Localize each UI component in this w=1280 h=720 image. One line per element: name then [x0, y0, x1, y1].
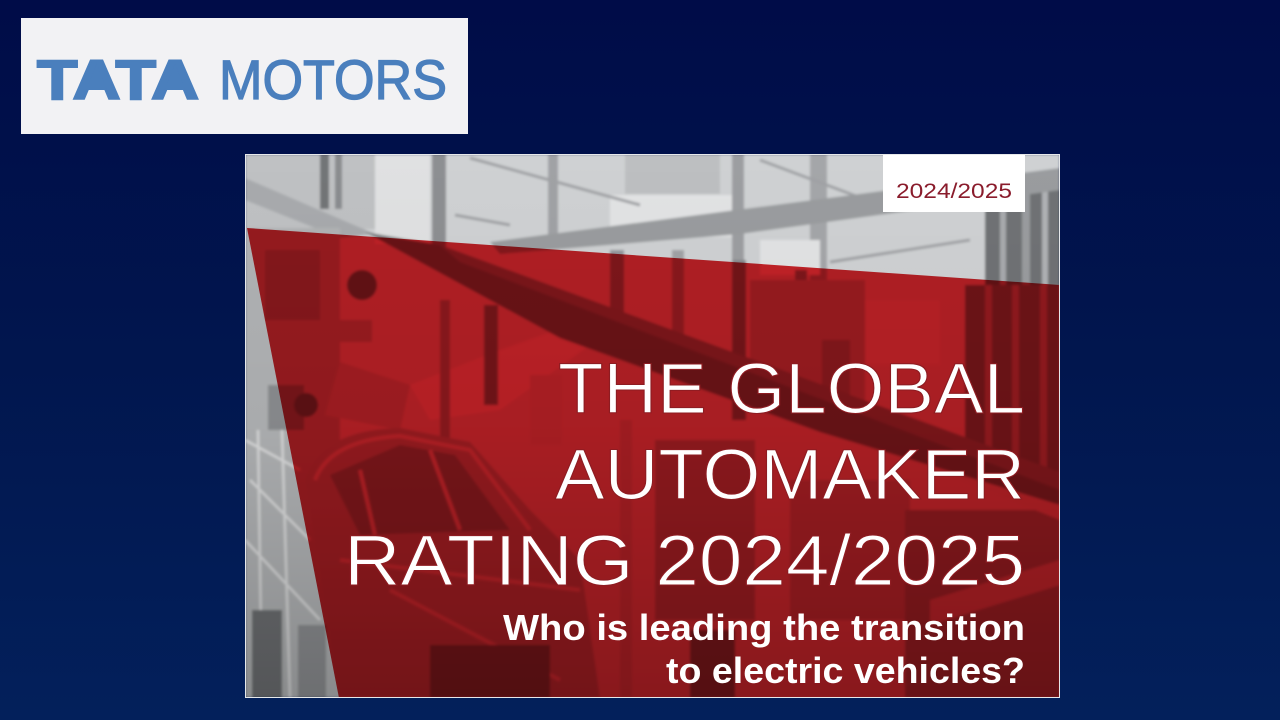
long diagonal dark beam — [365, 232, 1060, 505]
cover title: THE GLOBAL — [558, 350, 1025, 429]
cover title: AUTOMAKER — [555, 436, 1025, 515]
car body — [339, 428, 600, 697]
year tag: 2024/2025 — [896, 180, 1012, 203]
left red-zone machinery — [265, 250, 320, 320]
vertical columns — [439, 299, 451, 438]
report cover panel — [245, 154, 1060, 698]
year tag — [883, 155, 1025, 212]
cover subtitle: Who is leading the transition — [503, 607, 1025, 648]
diagonal grey beam — [245, 178, 375, 238]
cover photo: factory scene — [245, 154, 1060, 698]
logo wordmark: MOTORS: MOTORS — [219, 48, 447, 111]
cover subtitle — [503, 614, 1023, 684]
robot arm — [412, 334, 583, 418]
logo panel: Tata Motors — [21, 18, 468, 134]
lower right cabinets — [790, 480, 910, 620]
cover subtitle: to electric vehicles? — [666, 650, 1025, 691]
right cabinets — [750, 280, 865, 410]
cover title — [350, 362, 1023, 586]
horizontal beam — [490, 168, 1060, 254]
lower-left car frame steel — [245, 228, 340, 698]
cover title: RATING 2024/2025 — [344, 522, 1025, 601]
logo wordmark: TATA: TATA — [37, 48, 199, 111]
upper wall and equipment — [245, 154, 375, 229]
red angled overlay — [247, 228, 1060, 698]
white cover frame — [246, 154, 1060, 698]
